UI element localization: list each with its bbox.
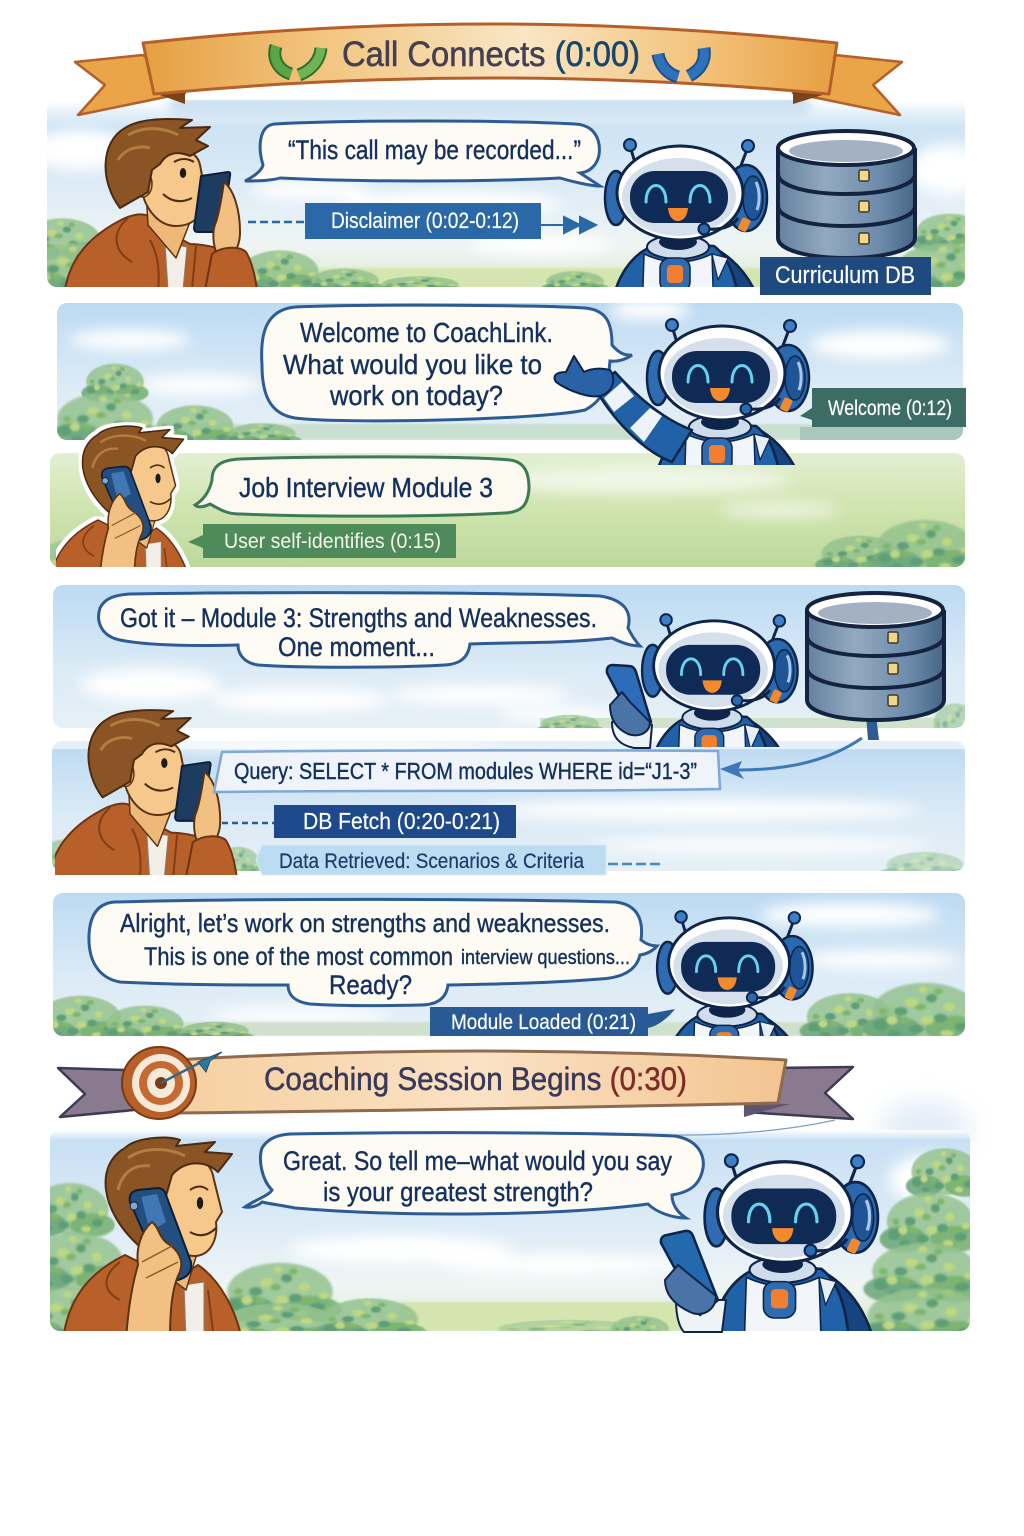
speech bubble: alright: Ready?: [329, 970, 412, 1000]
speech bubble: greatest strength: Great. So tell me–what would you say: [283, 1146, 672, 1176]
panel: welcome scene: [49, 300, 966, 449]
label: data retrieved: [256, 845, 606, 875]
icon: module database: [807, 593, 944, 720]
robot with phone and module database: [607, 593, 944, 785]
speech bubble: disclaimer: “This call may be recorded...”: [288, 135, 581, 165]
query box: Query: SELECT * FROM modules WHERE id=“J1-3”: [234, 758, 697, 784]
speech bubble: job interview: Job Interview Module 3: [239, 472, 493, 503]
robot phone and hand: [607, 665, 652, 748]
speech bubble: alright: [89, 899, 657, 1006]
speech bubble: welcome: [262, 305, 632, 421]
robot waving: [553, 318, 810, 465]
label: DB fetch: DB Fetch (0:20-0:21): [303, 808, 500, 834]
label: module loaded: Module Loaded (0:21): [451, 1011, 636, 1034]
speech bubble: greatest strength: [245, 1133, 703, 1218]
man with phone: [56, 422, 190, 567]
robot arm and hand: [554, 356, 692, 462]
banner: coaching session begins: [58, 1047, 853, 1119]
title text: Coaching Session Begins (0:30): [264, 1061, 687, 1097]
database stand: [866, 715, 879, 740]
arrow: database to query: [720, 738, 862, 779]
speech bubble: job interview: [195, 457, 529, 516]
banner: call connects: [75, 24, 902, 115]
panel: module lookup scene: [53, 585, 965, 728]
icon: target with dart: [122, 1047, 222, 1119]
panel: call connects scene: [47, 100, 965, 295]
panel: coaching question scene: [50, 1119, 970, 1333]
speech bubble: welcome: work on today?: [329, 380, 503, 411]
speech bubble: alright: interview questions...: [461, 947, 630, 969]
speech bubble: disclaimer: [245, 121, 600, 186]
man with phone: [65, 119, 257, 290]
dashed connector from data retrieved: [608, 863, 660, 865]
speech bubble: alright: This is one of the most common: [144, 943, 453, 971]
label: disclaimer: [305, 203, 541, 239]
robot: [656, 910, 814, 1036]
label: user self-identifies: [188, 524, 456, 558]
label: curriculum DB: [760, 257, 931, 295]
label: welcome: [800, 388, 966, 427]
label: user self-identifies: User self-identifies (0:15): [224, 530, 441, 553]
soft sky wash behind second banner: [880, 1100, 970, 1156]
speech bubble: got it: Got it – Module 3: Strengths and Weaknesses.: [120, 603, 597, 633]
label: DB fetch: [274, 805, 516, 838]
arrow: to robot: [541, 217, 596, 233]
label: disclaimer: Disclaimer (0:02-0:12): [331, 208, 519, 233]
icon: curriculum database: [778, 131, 915, 258]
panel: user response scene: [50, 422, 965, 567]
speech bubble: alright: Alright, let’s work on strengths and weaknesses.: [120, 908, 610, 938]
man with phone: [63, 1138, 242, 1340]
speech bubble: got it: [99, 593, 640, 667]
icon: green handset: [275, 46, 321, 75]
speech bubble: greatest strength: is your greatest strength?: [323, 1177, 593, 1207]
dashed connector to DB fetch: [222, 822, 274, 824]
title text: Call Connects (0:00): [342, 35, 640, 74]
robot phone and hand: [661, 1231, 726, 1332]
query box: [214, 750, 720, 792]
panel: module loaded scene: [53, 893, 965, 1036]
speech bubble: welcome: Welcome to CoachLink.: [300, 317, 553, 348]
label: data retrieved: Data Retrieved: Scenarios & Criteria: [279, 850, 584, 873]
man with phone: [49, 710, 237, 878]
robot: [604, 138, 768, 287]
panel: query scene: [33, 710, 970, 879]
speech bubble: got it: One moment...: [278, 632, 435, 662]
label: module loaded: [430, 1007, 675, 1036]
robot with phone: [705, 1154, 878, 1345]
icon: blue handset: [658, 48, 704, 77]
speech bubble: welcome: What would you like to: [283, 349, 542, 380]
label: welcome: Welcome (0:12): [828, 397, 952, 420]
shadow swoosh under banner: [666, 1120, 835, 1135]
dashed connector to disclaimer label: [248, 221, 305, 223]
label: curriculum DB: Curriculum DB: [775, 262, 915, 289]
